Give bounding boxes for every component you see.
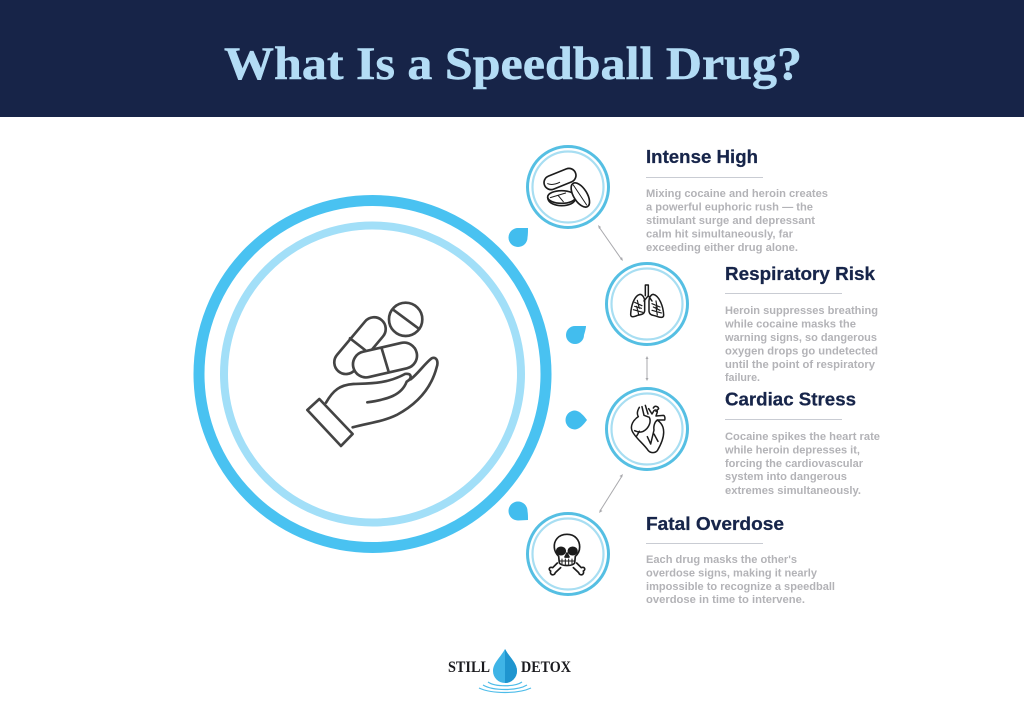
icon: pills — [542, 166, 593, 210]
text block: Intense High — [646, 146, 828, 254]
text block: Respiratory Risk: warning signs, so dangerous — [724, 332, 877, 344]
text block: Cardiac Stress: extremes simultaneously. — [725, 485, 861, 497]
text block: Cardiac Stress: system into dangerous — [725, 471, 847, 483]
text block: Intense High: Intense High — [646, 146, 758, 167]
text block: Fatal Overdose: Fatal Overdose — [646, 513, 784, 534]
logo: Still Detox — [448, 649, 572, 692]
text block: Cardiac Stress: forcing the cardiovascular — [725, 458, 864, 470]
text block: Intense High: a powerful euphoric rush — the — [646, 202, 813, 214]
text block: Respiratory Risk: while cocaine masks the — [724, 318, 856, 330]
text block: Fatal Overdose — [646, 513, 835, 606]
text block: Respiratory Risk: oxygen drops go undetected — [725, 346, 878, 358]
teardrop markers — [509, 228, 587, 520]
text block: Fatal Overdose: overdose signs, making it nearly — [646, 568, 818, 580]
text block: Cardiac Stress: while heroin depresses it, — [724, 444, 860, 456]
text block: Cardiac Stress: Cardiac Stress — [725, 388, 856, 410]
text block: Respiratory Risk: failure. — [725, 372, 760, 384]
text block: Fatal Overdose: overdose in time to intervene. — [646, 594, 805, 606]
icon: lungs — [631, 285, 664, 317]
text block: Cardiac Stress — [724, 388, 880, 497]
text block: Intense High: exceeding either drug alone. — [646, 242, 798, 254]
item circle: skull — [528, 514, 608, 594]
icon: anatomical heart — [631, 405, 665, 453]
text block: Intense High: stimulant surge and depressant — [646, 215, 815, 227]
text block: Respiratory Risk: until the point of respiratory — [725, 359, 876, 371]
icon: skull and crossbones — [549, 534, 585, 575]
text block: Respiratory Risk — [724, 263, 878, 384]
text block: Intense High: Mixing cocaine and heroin creates — [646, 188, 828, 200]
logo: Still Detox: DETOX — [521, 659, 572, 676]
text block: Fatal Overdose: Each drug masks the other's — [646, 554, 797, 566]
icon: hand holding pills — [307, 303, 437, 446]
text block: Respiratory Risk: Respiratory Risk — [725, 263, 876, 284]
header banner — [0, 0, 1024, 117]
main circle with hand and pills icon — [199, 200, 546, 548]
logo: Still Detox: STILL — [448, 659, 490, 676]
item circle: pills — [528, 146, 608, 228]
connector arrows — [598, 225, 648, 513]
text block: Cardiac Stress: Cocaine spikes the heart rate — [725, 431, 880, 443]
item circle: lungs — [606, 264, 688, 344]
text block: Respiratory Risk: Heroin suppresses breathing — [725, 305, 878, 317]
title: What Is a Speedball Drug? — [224, 38, 802, 90]
item circle: heart — [606, 388, 688, 470]
text block: Fatal Overdose: impossible to recognize a speedball — [646, 581, 835, 593]
text block: Intense High: calm hit simultaneously, far — [646, 228, 794, 240]
